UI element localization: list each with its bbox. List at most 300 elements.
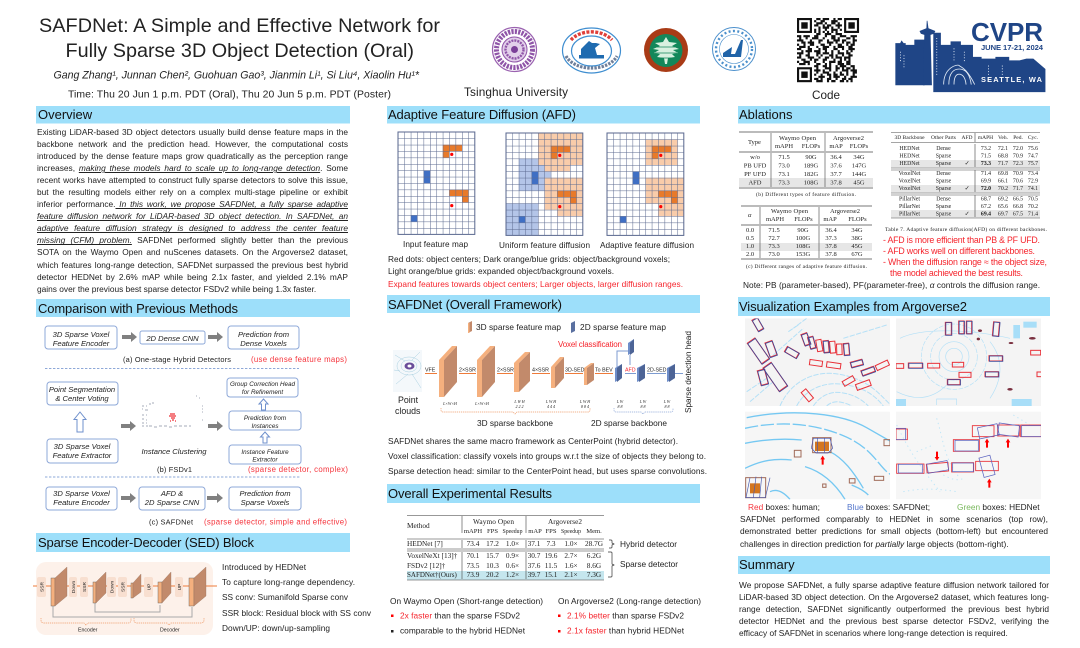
ablation table b: 73.1 [778, 171, 790, 178]
results table: 19.6 [545, 551, 558, 560]
comparison diagram [45, 326, 348, 526]
overview text block: missing (CFM) problem. SAFDNet performed slightly better than the previous [37, 235, 348, 245]
framework diagram: VFE [425, 368, 436, 374]
framework diagram: 2×SSR [497, 368, 514, 374]
results table: 39.7 [528, 570, 541, 579]
overview text block: increases, making these models hard to scale up to long-range detection. Some [37, 163, 348, 173]
results table: 73.9 [467, 570, 480, 579]
visualization legend: boxes: HEDNet [982, 502, 1040, 512]
ablation table c: FLOPs [794, 216, 813, 223]
SED notes: SSR block: Residual block with SS conv [222, 608, 372, 618]
heading: Adaptive Feature Diffusion: Adaptive Feature Diffusion (AFD) [388, 107, 576, 122]
framework legend: 3D sparse feature map [476, 322, 561, 332]
heading: Ablations: Ablations [739, 107, 793, 122]
results table [407, 516, 604, 580]
row a: one-stage hybrid detectors: 3D Sparse Voxel [53, 330, 110, 339]
ablation table b [739, 132, 873, 198]
logo: Tsinghua University [492, 28, 536, 72]
ablation table b: 36.4 [830, 154, 842, 161]
results table: Waymo Open [473, 517, 514, 526]
framework diagram: 2D sparse backbone [591, 418, 667, 428]
row b: FSDv1: Extractor [252, 456, 278, 464]
ablation table b: 37.8 [830, 180, 842, 186]
ablation table 7: 73.3 [981, 161, 991, 167]
results table: 11.5 [545, 561, 558, 570]
summary text block: We propose SAFDNet, a fully sparse adaptive feature diffusion network tailored for [739, 580, 1049, 590]
results table: 37.1 [528, 539, 541, 548]
results table: 2.7× [564, 551, 578, 560]
framework diagram: L W [663, 399, 671, 404]
ablation table 7: 72.0 [1013, 146, 1023, 152]
row c: SAFDNet: Sparse Voxels [241, 498, 290, 507]
ablation table c: mAPH [766, 216, 784, 223]
label: sparse detection head: Sparse detection head [683, 331, 693, 413]
ablation table 7: 70.2 [998, 186, 1008, 192]
table brackets and group labels: Hybrid detector [620, 539, 677, 549]
visualization description: SAFDNet performed comparably to HEDNet in some scenarios (top row), [740, 514, 1048, 524]
ablation table 7: 68.8 [998, 154, 1008, 160]
results table: 7.3 [546, 539, 556, 548]
AFD grid captions: Adaptive feature diffusion [600, 241, 694, 250]
QR code label: Code [812, 89, 840, 102]
AFD notes [388, 254, 683, 289]
row c: SAFDNet: Prediction from [239, 489, 291, 498]
heading: Overview [36, 106, 350, 124]
overview text block: inferior performance. In this work, we propose SAFDNet, a fully sparse adaptive [37, 199, 348, 209]
results table: 1.0× [506, 539, 519, 548]
results table: 17.2 [486, 539, 499, 548]
authors: Gang Zhang¹, Junnan Chen², Guohuan Gao³, Jianmin Li¹, Si Liu⁴, Xiaolin Hu¹* [54, 70, 420, 82]
row b: FSDv1: Instance Feature [241, 449, 289, 456]
ablation findings [883, 235, 1047, 278]
results table: mAPH [464, 528, 482, 535]
ablation table b: PF UFD [744, 171, 766, 178]
framework diagram: clouds [395, 406, 421, 416]
framework diagram: L W [639, 399, 647, 404]
heading: Visualization Examples: Visualization Examples from Argoverse2 [739, 299, 967, 314]
SED block diagram: SSR [40, 582, 46, 592]
ablation table c: Waymo Open [771, 208, 809, 215]
row c: SAFDNet: (sparse detector, simple and effective) [204, 518, 347, 526]
SED block diagram: UP [177, 584, 183, 590]
ablation table b: 37.6 [830, 162, 842, 170]
results table: 20.2 [486, 570, 499, 579]
ablation table b: 189G [804, 162, 819, 170]
ablation table b: (b) Different types of feature diffusion. [756, 191, 857, 198]
overview text block: introduced by the dense feature maps grow quadratically as the perception range [37, 151, 348, 161]
row b: FSDv1: Feature Extractor [53, 451, 112, 460]
ablation table c: 73.0 [768, 251, 780, 258]
framework legend: 2D sparse feature map [580, 322, 666, 332]
AFD grid: adaptive feature diffusion [607, 133, 684, 235]
results table: 0.6× [506, 561, 519, 570]
ablation table 7: 75.7 [1028, 161, 1038, 167]
title: Fully Sparse 3D Object Detection (Oral) [66, 40, 414, 62]
affiliation label: Tsinghua University [464, 85, 568, 99]
framework diagram: 2 2 2 [516, 404, 524, 409]
ablation table 7: Dense [936, 146, 951, 152]
results table: 73.4 [467, 539, 480, 548]
ablation table 7: Dense [936, 196, 951, 202]
visualization legend: boxes: SAFDNet; [866, 502, 930, 512]
row b: FSDv1: (sparse detector, complex) [248, 465, 348, 474]
heading: Visualization Examples [738, 297, 1050, 316]
ablation table b: 71.5 [778, 154, 790, 161]
results: Argoverse2 findings: On Argoverse2 (Long-range detection) [558, 596, 701, 606]
overview text block: detector HEDNet by 2.6% mAP while being 2.1x faster, and yielded 2.1% mAP [37, 272, 348, 282]
results table: FSDv2 [12]† [407, 561, 446, 570]
ablation table 7: 71.7 [998, 161, 1008, 167]
visualization legend: Blue [847, 502, 864, 512]
ablation table 7: Cyc. [1028, 135, 1039, 141]
results table: HEDNet [7] [407, 539, 443, 548]
title: SAFDNet: A Simple and Effective Network for [39, 15, 440, 37]
SED block diagram [33, 562, 217, 635]
AFD grid: uniform feature diffusion [506, 133, 583, 235]
ablation table 7: PillarNet [899, 212, 920, 218]
ablation table c: (c) Different ranges of adaptive feature diffusion. [746, 263, 868, 270]
overview text block: backbone network and the prediction head. However, the computational costs [37, 139, 348, 149]
ablation table 7: 70.6 [1013, 178, 1023, 184]
results table: Speedup [503, 529, 523, 535]
overview text block: feature diffusion network for LiDAR-based 3D object detection. In SAFDNet, an [37, 211, 348, 221]
panel: top-right scene [896, 318, 1042, 406]
row c: SAFDNet: 2D Sparse CNN [144, 498, 200, 507]
results table: 28.7G [585, 539, 604, 548]
results table: 10.3 [486, 561, 499, 570]
ablation table c: α [748, 212, 752, 219]
results table: 7.3G [587, 570, 602, 579]
ablation table 7: 67.2 [981, 204, 991, 210]
ablation table c [741, 206, 872, 270]
row a: one-stage hybrid detectors: (use dense feature maps) [251, 355, 347, 364]
results table: 73.5 [467, 561, 480, 570]
ablation table c: 153G [796, 251, 811, 258]
ablation table c: 0.0 [746, 227, 754, 234]
ablation table c: 45G [851, 243, 863, 250]
overview text block: SOTA on the Waymo Open and nuScenes datasets. On the Argoverse2 dataset, [37, 247, 348, 257]
visualization legend: Red boxes: human; [748, 502, 820, 512]
ablation table 7: 75.6 [1028, 146, 1038, 152]
ablation table b: 147G [852, 162, 867, 170]
ablation table 7: VoxelNet [899, 178, 921, 184]
row a: one-stage hybrid detectors [45, 326, 347, 364]
ablation table c: 37.8 [825, 243, 837, 250]
ablation table b: FLOPs [850, 143, 869, 150]
ablation table 7: Veh. [998, 135, 1009, 141]
framework diagram: 4 4 4 [547, 404, 555, 409]
visualization panels [745, 317, 1042, 499]
ablation table 7: Sparse [936, 154, 952, 160]
ablation table 7: 67.5 [1013, 212, 1023, 218]
results table: Method [407, 521, 430, 530]
ablation table 7: PillarNet [899, 204, 920, 210]
ablation table b: Argoverse2 [833, 135, 864, 142]
heading: Sparse Encoder-Decoder Block [36, 533, 350, 552]
logo: university of science and technology [562, 28, 620, 73]
results: Waymo Open findings: 2x faster than the sparse FSDv2 [400, 610, 520, 620]
session time: Time: Thu 20 Jun 1 p.m. PDT (Oral), Thu 20 Jun 5 p.m. PDT (Poster) [68, 90, 391, 100]
table brackets and group labels [608, 539, 678, 577]
ablation table 7: 71.4 [981, 171, 991, 177]
row b: FSDv1: & Center Voting [55, 394, 109, 403]
heading: Summary: Summary [739, 557, 795, 572]
framework notes: Sparse detection head: similar to the CenterPoint head, but uses sparse convolutions. [388, 466, 707, 476]
results table: SAFDNet†(Ours) [407, 571, 457, 579]
ablation table c: 71.5 [768, 227, 780, 234]
panel: bottom-left scene [745, 412, 892, 499]
ablation table 7: 69.8 [998, 171, 1008, 177]
ablation table c: Argoverse2 [830, 208, 860, 215]
ablation table b: 144G [852, 171, 867, 178]
row c: SAFDNet: AFD & [160, 489, 183, 498]
SED block diagram: Decoder [160, 628, 180, 634]
ablation table b: FLOPs [802, 143, 821, 150]
ablation table 7: 66.1 [998, 178, 1008, 184]
row a: one-stage hybrid detectors: Dense Voxels [240, 339, 287, 348]
heading: Ablations [738, 106, 1050, 124]
row c: SAFDNet [46, 487, 347, 526]
overview text block [37, 127, 348, 294]
ablation table 7: 68.7 [981, 196, 991, 202]
summary text block: efficacy of SAFDNet in scenarios where long-range detection is required. [739, 628, 1008, 638]
results: Waymo Open findings: On Waymo Open (Short-range detection) [390, 596, 543, 606]
ablation table c: 0.5 [746, 235, 754, 242]
framework diagram: 8 8 4 [581, 404, 589, 409]
results table: FPS [487, 528, 498, 535]
results table: Speedup [561, 529, 581, 535]
results table: Argoverse2 [548, 517, 582, 526]
overview text block: adaptive feature diffusion strategy is designed to address the center feature [37, 223, 348, 233]
overview text block: but the resulting models either rely on a complex multi-stage pipeline or exhibit [37, 187, 348, 197]
row a: one-stage hybrid detectors: Feature Encoder [53, 339, 110, 348]
ablation table 7: HEDNet [899, 161, 920, 167]
ablation findings: - When the diffusion range ≈ the object size, [883, 257, 1047, 267]
row b: FSDv1: Instances [252, 423, 279, 430]
ablation table c: 37.3 [825, 235, 837, 242]
ablation table c: 73.3 [768, 243, 780, 250]
framework diagram: 4×SSR [532, 368, 549, 374]
framework diagram: To BEV [595, 368, 613, 374]
ablation table 7 [885, 132, 1048, 233]
overview text block: which features long-range detection, SAFDNet surpassed the previous best hybrid [37, 260, 348, 270]
results table: mAP [528, 528, 542, 535]
AFD grid captions [403, 240, 694, 250]
ablation table b: 37.7 [830, 171, 842, 178]
results table: 8.6G [587, 561, 602, 570]
framework diagram: L×W×H [442, 401, 458, 406]
row b: FSDv1: 3D Sparse Voxel [54, 442, 111, 451]
ablation table b: w/o [750, 154, 760, 161]
logo: CVPR 2024 Seattle [895, 17, 1045, 92]
SED block diagram: SSR [120, 582, 126, 592]
ablation table c: 1.0 [746, 243, 754, 250]
results table: 30.7 [528, 551, 541, 560]
ablation table c: 90G [797, 227, 809, 234]
ablation table c: 67G [851, 251, 863, 258]
logo: forestry university [644, 28, 688, 72]
ablation table c: FLOPs [848, 216, 867, 223]
AFD grid: input feature map [398, 132, 475, 234]
row b: FSDv1: for Refinement [242, 389, 283, 396]
SED notes: Introduced by HEDNet [222, 562, 307, 572]
ablation table 7: HEDNet [899, 146, 920, 152]
ablation table 7: 72.9 [1028, 178, 1038, 184]
row b: FSDv1: Instance Clustering [141, 447, 207, 456]
results table: 15.7 [486, 551, 499, 560]
visualization description [740, 514, 1048, 549]
ablation table b: 45G [853, 180, 865, 186]
results table: 1.0× [564, 539, 578, 548]
framework diagram: L W H [579, 399, 591, 404]
SED block diagram: SSR [82, 582, 88, 592]
ablation table c: 38G [851, 235, 863, 242]
ablation table c: 100G [796, 235, 811, 242]
ablation table 7: 70.9 [1013, 171, 1023, 177]
summary text block: range detection, SAFDNet significantly outperformed the previous best hybrid [739, 604, 1049, 614]
ablation table 7: ✓ [965, 212, 969, 218]
ablation table 7: ✓ [965, 161, 969, 167]
ablation table c: 108G [796, 243, 811, 250]
heading: Overall Experimental Results [387, 484, 700, 503]
ablation table b: 108G [804, 180, 819, 186]
ablation table b: 90G [805, 154, 817, 161]
ablation table b: 182G [804, 171, 819, 178]
ablation table 7: VoxelNet [899, 186, 921, 192]
results: Waymo Open findings [390, 596, 543, 636]
summary text block [739, 580, 1049, 638]
heading: Summary [738, 556, 1050, 574]
results table: FPS [545, 528, 557, 535]
heading: SAFDNet Overall Framework [387, 295, 700, 313]
ablation table 7: VoxelNet [899, 171, 921, 177]
ablation table c: 2.0 [746, 251, 754, 258]
heading: Overall Experimental Results: Overall Experimental Results [388, 486, 552, 501]
ablation findings: - AFD works well on different backbones. [883, 246, 1035, 256]
results: Argoverse2 findings: 2.1x faster than hybrid HEDNet [567, 626, 685, 636]
SED notes [222, 562, 372, 633]
ablation table 7: 70.5 [1028, 196, 1038, 202]
ablation table b: 73.3 [778, 180, 790, 186]
ablation table 7: 70.2 [1028, 204, 1038, 210]
framework diagram: L×W×H [474, 401, 490, 406]
ablation table b: AFD [748, 180, 762, 186]
overview text block: gains over the previous best sparse detector FSDv2 while being 1.3x faster. [37, 284, 316, 294]
ablation table b: PB UFD [744, 162, 767, 170]
SED notes: SS conv: Sumanifold Sparse conv [222, 592, 349, 602]
ablation table 7: 69.4 [981, 212, 991, 218]
AFD grid captions: Input feature map [403, 240, 468, 249]
ablation table 7: 3D Backbone [894, 135, 925, 141]
heading: Comparison with Previous Methods [36, 299, 350, 317]
ablation table 7: mAPH [978, 135, 993, 141]
ablation table 7: Sparse [936, 204, 952, 210]
framework diagram: 8 8 [664, 404, 670, 409]
visualization legend: Green [957, 502, 980, 512]
ablation table 7: ✓ [965, 186, 969, 192]
ablation table 7: 73.2 [981, 146, 991, 152]
heading: Comparison with Previous Methods: Comparison with Previous Methods [38, 301, 238, 316]
ablation table 7: 70.9 [1013, 154, 1023, 160]
row b: FSDv1: Prediction from [244, 415, 286, 422]
ablation table 7: 71.5 [981, 154, 991, 160]
framework legend [468, 321, 666, 333]
point cloud image [393, 350, 422, 392]
logo: Beihang University [712, 28, 756, 70]
framework diagram: Voxel classification [558, 340, 622, 349]
heading: Sparse Encoder-Decoder Block: Sparse Encoder-Decoder (SED) Block [38, 535, 254, 550]
logo: CVPR 2024 Seattle: CVPR [971, 17, 1043, 47]
SED block diagram: Encoder [78, 628, 98, 634]
ablation table 7: Sparse [936, 178, 952, 184]
results table: 1.6× [564, 561, 578, 570]
ablation table 7: 74.1 [1028, 186, 1038, 192]
ablation table c: 34G [851, 227, 863, 234]
results table: 70.1 [467, 551, 480, 560]
ablation table b: Type [748, 139, 761, 146]
heading: Overview: Overview [38, 107, 93, 122]
ablation table 7: 72.1 [998, 146, 1008, 152]
logo: CVPR 2024 Seattle: SEATTLE, WA [981, 75, 1043, 84]
results: Argoverse2 findings: 2.1% better than sparse FSDv2 [567, 610, 684, 620]
framework diagram: 8 8 [640, 404, 646, 409]
SED block diagram: UP [146, 584, 152, 590]
SED notes: Down/UP: down/up-sampling [222, 623, 330, 633]
ablation table 7: AFD [961, 135, 973, 141]
framework diagram: Point [398, 395, 419, 405]
results: Argoverse2 findings [558, 596, 701, 636]
overview text block: Existing LiDAR-based 3D object detectors usually build dense feature maps in the [37, 127, 348, 137]
framework notes: SAFDNet shares the same macro framework as CenterPoint (hybrid detector). [388, 436, 678, 446]
ablation table 7: PillarNet [899, 196, 920, 202]
framework diagram: L W H [513, 399, 526, 404]
ablation findings: the model achieved the best results. [890, 268, 1023, 278]
framework notes [388, 436, 707, 476]
ablation table 7: 69.2 [998, 196, 1008, 202]
ablation table 7: 69.7 [998, 212, 1008, 218]
row a: one-stage hybrid detectors: (a) One-stage Hybrid Detectors [123, 355, 231, 364]
AFD notes: Light orange/blue grids: expanded object/background voxels. [388, 266, 614, 276]
framework diagram: 3D-SED [565, 368, 585, 374]
overview text block: recent works have attempted to construct fully sparse detectors to solve this issue, [37, 175, 348, 185]
row c: SAFDNet: Feature Encoder [53, 498, 110, 507]
ablation table 7: 74.7 [1028, 154, 1038, 160]
ablation table 7: 71.4 [1028, 212, 1038, 218]
results table: 6.2G [587, 551, 602, 560]
results: Waymo Open findings: comparable to the hybrid HEDNet [400, 626, 526, 636]
framework diagram: 2×SSR [459, 368, 476, 374]
framework diagram: 2D-SED [647, 368, 667, 374]
ablation table 7: 72.3 [1013, 161, 1023, 167]
ablation table c: 36.4 [825, 227, 837, 234]
row a: one-stage hybrid detectors: 2D Dense CNN [145, 334, 199, 343]
ablation note: Note: PB (parameter-based), PF(parameter-free), α controls the diffusion range. [743, 280, 1040, 290]
AFD grid captions: Uniform feature diffusion [499, 241, 590, 250]
title [39, 15, 440, 62]
framework diagram: L W [616, 399, 624, 404]
row b: FSDv1: Point Segmentation [49, 385, 115, 394]
results table: 1.2× [506, 570, 519, 579]
results table: Mem. [586, 528, 602, 535]
ablation table 7: Dense [936, 171, 951, 177]
ablation table b: mAP [829, 143, 843, 150]
framework diagram: 8 8 [618, 404, 622, 409]
ablation table b: 73.0 [778, 162, 790, 170]
row a: one-stage hybrid detectors: Prediction from [238, 330, 289, 339]
ablation table c: 37.8 [825, 251, 837, 258]
ablation table 7: 65.6 [998, 204, 1008, 210]
AFD notes: Expand features towards object centers; Larger objects, larger diffusion ranges. [388, 279, 683, 289]
